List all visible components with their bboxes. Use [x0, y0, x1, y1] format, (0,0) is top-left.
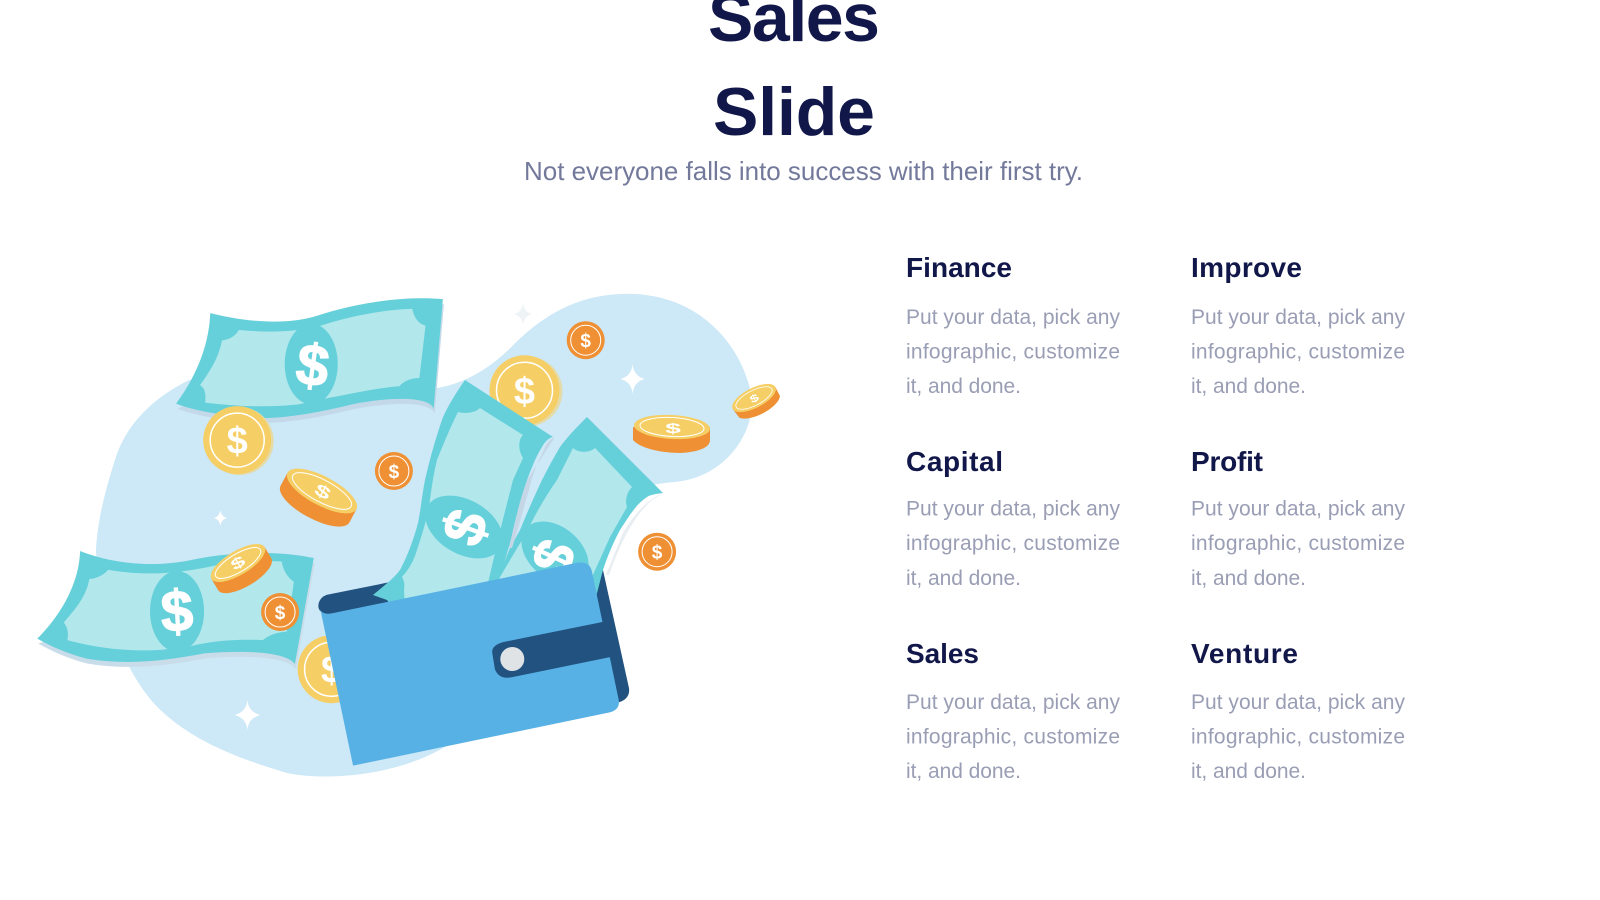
title: [708, 0, 880, 150]
banknote: in wallet right: [480, 417, 663, 620]
item: Venture: infographic, customize: [1191, 726, 1405, 748]
item: Venture: Venture: [1191, 638, 1298, 669]
gold coin behind wallet: $: [321, 650, 342, 692]
gold coin left: [203, 406, 274, 475]
flat coin: centre left: [274, 460, 363, 535]
orange coin: [567, 321, 605, 359]
item: Sales: Put your data, pick any: [906, 691, 1120, 714]
item: Capital: Capital: [906, 446, 1003, 477]
banknote: top left: [176, 298, 444, 423]
item: Finance: infographic, customize: [906, 340, 1120, 364]
item: Capital: [906, 446, 1120, 590]
item: Sales: Sales: [906, 638, 979, 669]
sparkle: [621, 364, 645, 394]
banknote: in wallet right: $: [518, 530, 589, 585]
banknote: in wallet left: [373, 380, 555, 610]
item: Venture: [1191, 638, 1406, 783]
wallet back: [318, 566, 629, 706]
orange coin on banknote: $: [275, 603, 286, 624]
item: Improve: Put your data, pick any: [1191, 306, 1406, 329]
item: Sales: it, and done.: [906, 760, 1021, 783]
item: Capital: Put your data, pick any: [906, 498, 1120, 520]
subtitle: Not everyone falls into success with their first try.: [524, 156, 1083, 186]
item: Sales: infographic, customize: [906, 726, 1120, 748]
flat coin: far right: $: [748, 391, 761, 406]
item: Profit: [1191, 446, 1406, 590]
item: Improve: Improve: [1191, 252, 1302, 283]
item: Improve: infographic, customize: [1191, 340, 1405, 364]
orange coin: [375, 452, 413, 490]
flat coin: on banknote: [205, 537, 277, 600]
banknote: top left: $: [292, 331, 333, 400]
item: Venture: Put your data, pick any: [1191, 691, 1406, 714]
item: Profit: Put your data, pick any: [1191, 498, 1406, 520]
sparkle: [514, 303, 532, 325]
orange coin: $: [652, 543, 663, 564]
orange coin: [638, 533, 676, 571]
illustration: money and wallet: [37, 294, 783, 776]
wallet strap: [492, 622, 611, 678]
wallet front: [320, 562, 619, 766]
flat coin: far right: [728, 378, 783, 425]
banknote: lower left: $: [159, 578, 195, 645]
item: Venture: it, and done.: [1191, 760, 1306, 783]
item: Profit: infographic, customize: [1191, 532, 1405, 555]
wallet snap: [500, 647, 524, 671]
orange coin on banknote: [261, 593, 299, 631]
item: Improve: it, and done.: [1191, 375, 1306, 398]
gold coin behind wallet: [298, 635, 366, 703]
item: Finance: [906, 252, 1120, 398]
item: Capital: it, and done.: [906, 567, 1021, 590]
gold coin left: $: [227, 421, 248, 463]
orange coin: $: [580, 331, 591, 352]
gold coin top centre: $: [514, 371, 535, 413]
item: Profit: it, and done.: [1191, 567, 1306, 590]
background blob: [96, 294, 752, 776]
sparkle: [213, 510, 227, 526]
item: Sales: [906, 638, 1120, 783]
flat coin: centre left: $: [311, 480, 334, 504]
orange coin: $: [389, 462, 400, 483]
sparkle: [234, 700, 260, 730]
item: Capital: infographic, customize: [906, 532, 1120, 555]
gold coin top centre: [490, 355, 562, 426]
item: Finance: Finance: [906, 252, 1012, 283]
flat coin: on banknote: $: [228, 552, 249, 574]
item: Improve: [1191, 252, 1406, 398]
item: Finance: it, and done.: [906, 375, 1021, 398]
banknote: in wallet left: $: [429, 501, 501, 554]
banknote: lower left: [37, 551, 315, 669]
item: Profit: Profit: [1191, 446, 1263, 477]
title: Slide: [713, 74, 875, 150]
flat coin: right: [633, 413, 711, 453]
flat coin: right: $: [665, 420, 681, 436]
item: Finance: Put your data, pick any: [906, 306, 1120, 329]
